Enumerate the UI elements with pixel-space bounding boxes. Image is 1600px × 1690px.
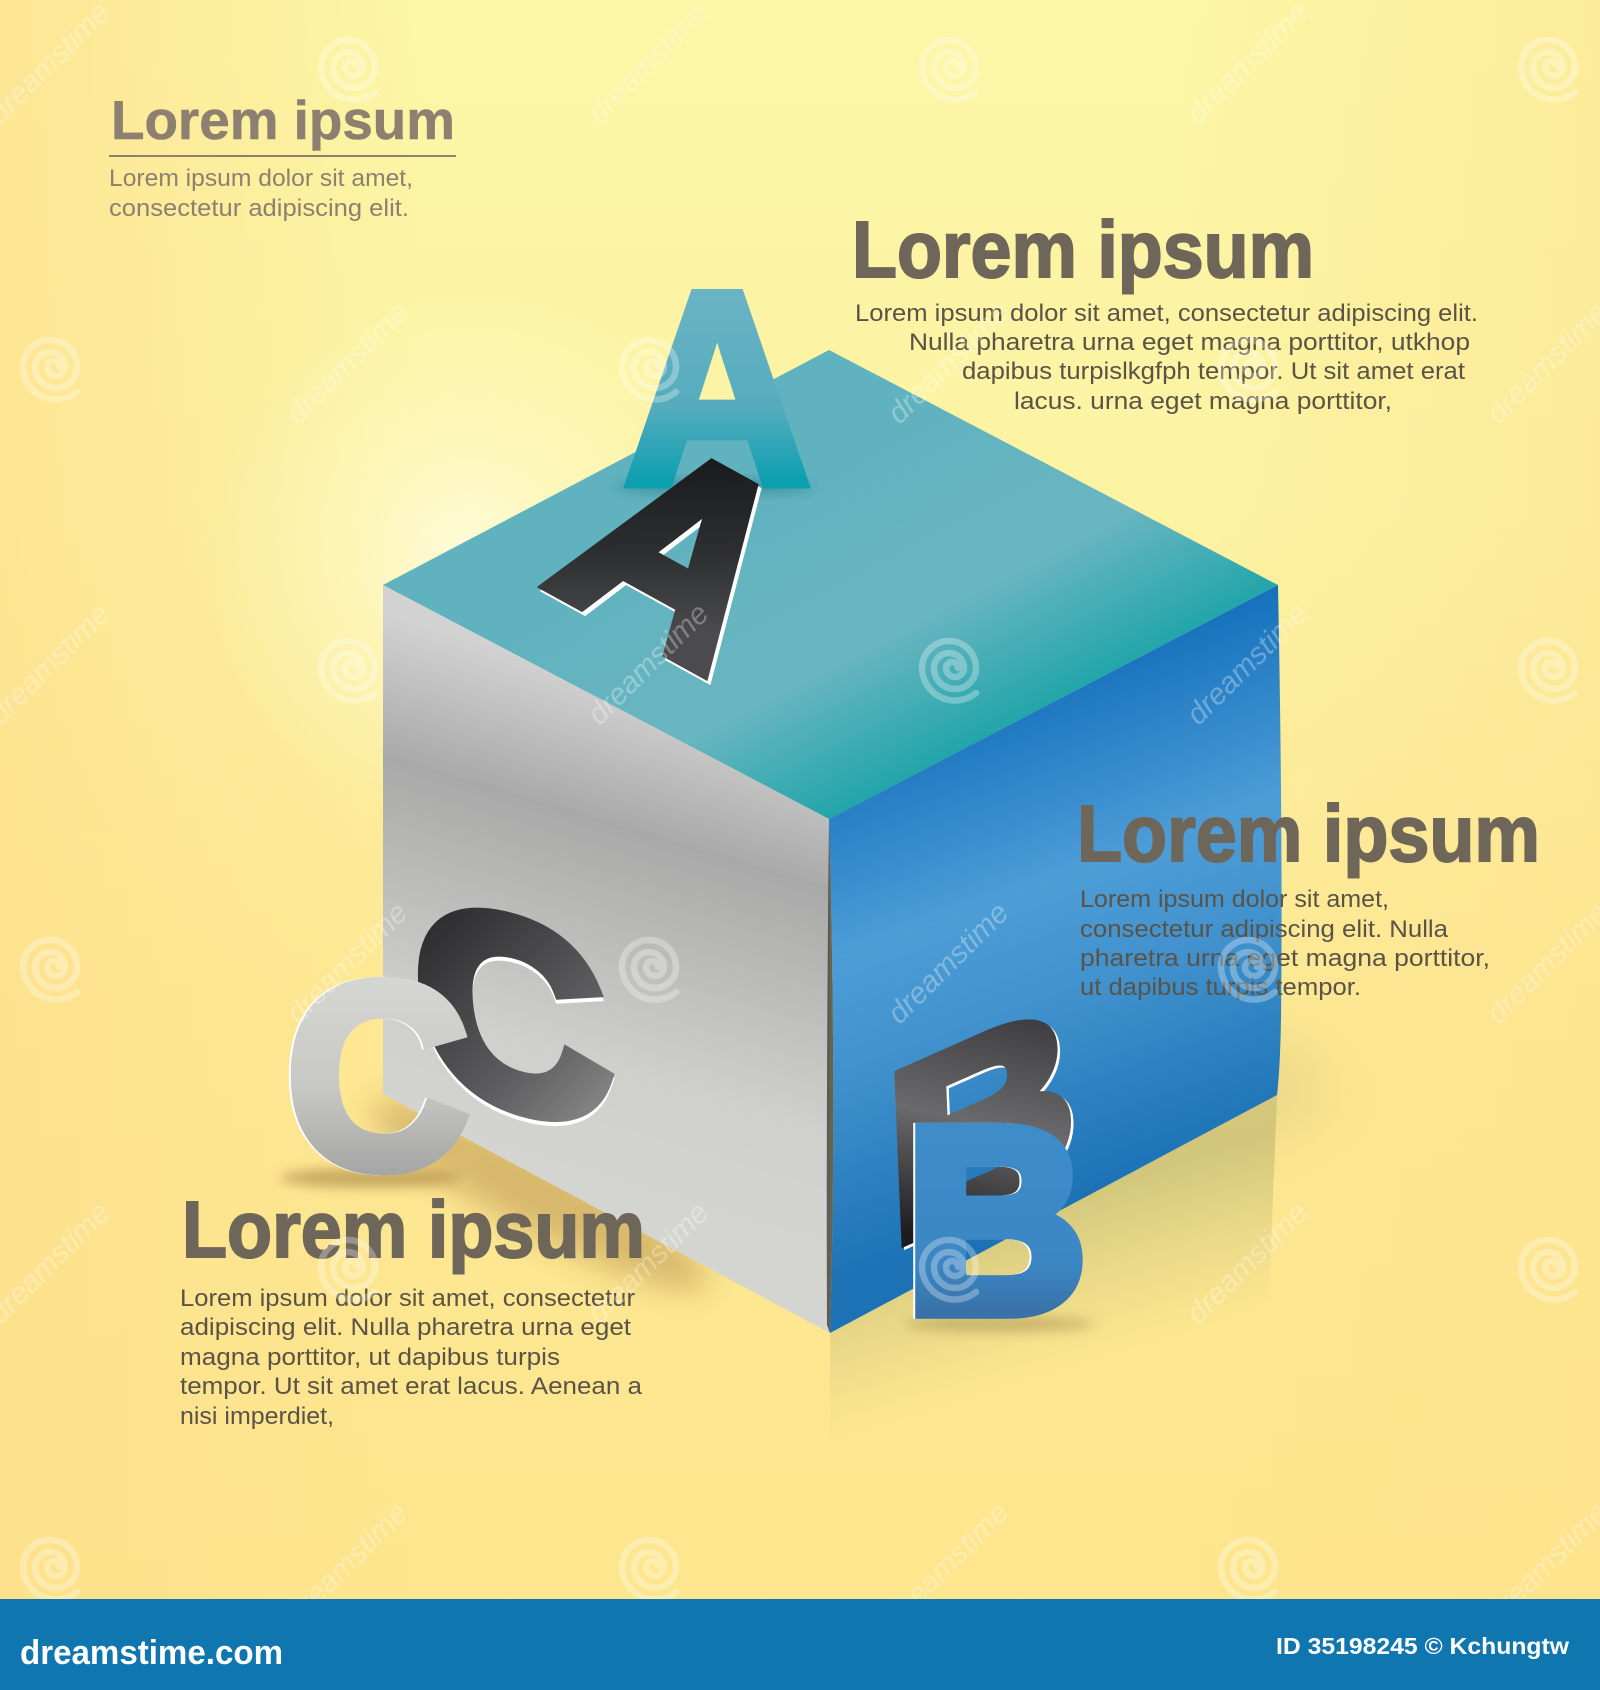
watermark overlay: dreamstime: [280, 896, 414, 1030]
watermark overlay: dreamstime: [1180, 1196, 1314, 1330]
watermark overlay: dreamstime: [1180, 0, 1314, 130]
watermark overlay: dreamstime: [581, 597, 715, 731]
letter A standing: A: [624, 236, 810, 542]
body: B: consectetur adipiscing elit. Nulla: [1080, 916, 1448, 943]
heading: A: Lorem ipsum: [852, 205, 1314, 294]
watermark overlay: dreamstime: [881, 896, 1015, 1030]
body: C: Lorem ipsum dolor sit amet, consectetur: [180, 1285, 635, 1312]
letter B cut-out: B: [881, 947, 1080, 1298]
body: C: magna porttitor, ut dapibus turpis: [180, 1344, 560, 1371]
letter B standing: B: [906, 1075, 1087, 1367]
body: A: dapibus turpislkgfph tempor. Ut sit amet erat: [962, 358, 1465, 385]
watermark overlay: dreamstime: [280, 1496, 414, 1630]
letter A cut-out: A: [510, 383, 847, 722]
body: top left: Lorem ipsum dolor sit amet,: [109, 165, 413, 192]
letter C standing: C: [286, 928, 469, 1223]
letter B standing: B: [904, 1075, 1085, 1367]
body: A: lacus. urna eget magna porttitor,: [1014, 388, 1392, 415]
cube: [383, 350, 1282, 1333]
letter C cut-out: C: [400, 844, 624, 1190]
text block: C: [180, 1185, 645, 1430]
body: C: tempor. Ut sit amet erat lacus. Aenean a: [180, 1373, 642, 1400]
watermark overlay: dreamstime: [280, 296, 414, 430]
letter B cut-out: B: [884, 949, 1083, 1300]
body: B: pharetra urna eget magna porttitor,: [1080, 945, 1490, 972]
letter C cut-out: C: [400, 840, 624, 1186]
body: C: nisi imperdiet,: [180, 1403, 334, 1430]
footer image id: ID 35198245 © Kchungtw: [1276, 1633, 1569, 1659]
letter A cut-out: A: [513, 387, 850, 726]
body: top left: consectetur adipiscing elit.: [109, 195, 409, 222]
watermark overlay: dreamstime: [581, 0, 715, 130]
footer logo text: dreamstime.com: [20, 1634, 283, 1672]
cube left face: [383, 585, 830, 1333]
underline: [109, 155, 456, 157]
body: B: ut dapibus turpis tempor.: [1080, 974, 1361, 1001]
watermark overlay: dreamstime: [581, 1196, 715, 1330]
body: A: Lorem ipsum dolor sit amet, consectetur adipiscing elit.: [855, 300, 1478, 327]
watermark overlay: dreamstime: [881, 1496, 1015, 1630]
body: A: Nulla pharetra urna eget magna porttitor, utkhop: [909, 329, 1470, 356]
text block: B: [1077, 789, 1540, 1001]
ground shadows and reflections: [280, 1035, 1330, 1470]
watermark overlay: dreamstime: [1180, 597, 1314, 731]
letter C standing: C: [284, 928, 467, 1223]
text block: A: [852, 205, 1478, 415]
body: B: Lorem ipsum dolor sit amet,: [1080, 886, 1389, 913]
cube right face: [829, 585, 1282, 1333]
footer banner: [0, 1599, 1600, 1690]
heading: B: Lorem ipsum: [1077, 789, 1540, 878]
heading: top left: Lorem ipsum: [111, 89, 455, 151]
heading: C: Lorem ipsum: [182, 1185, 645, 1274]
body: C: adipiscing elit. Nulla pharetra urna eget: [180, 1314, 631, 1341]
text block: top left: [109, 89, 456, 222]
cube edge shading: [827, 819, 833, 1333]
watermark overlay: dreamstime: [881, 296, 1015, 430]
cube top face: [383, 350, 1278, 819]
